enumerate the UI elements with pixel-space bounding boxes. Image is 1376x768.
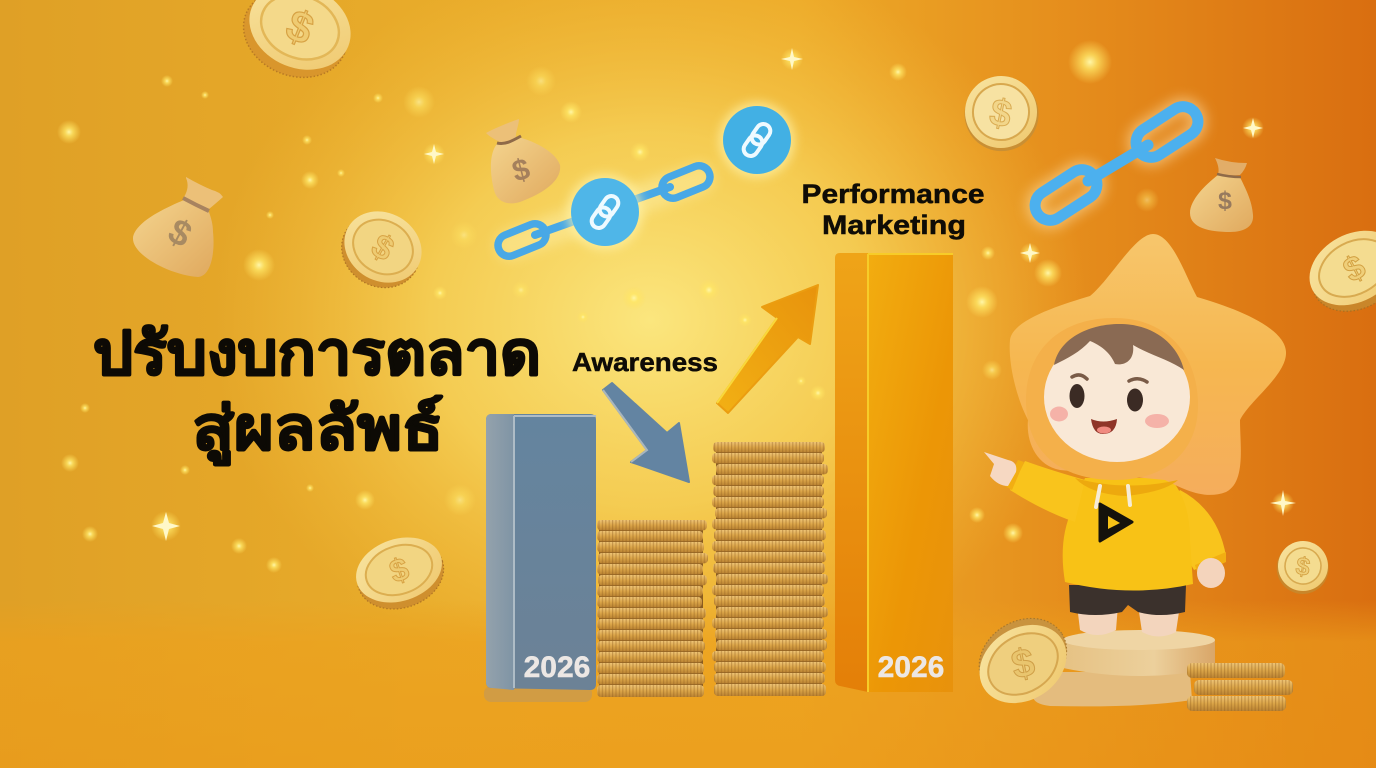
money bag: left: $	[162, 210, 199, 255]
mascot legs	[1077, 605, 1180, 636]
coin: upper right: $	[986, 91, 1015, 137]
mascot cheeks	[1050, 406, 1169, 428]
coin: upper right	[958, 69, 1046, 158]
coin stacks	[597, 442, 828, 697]
bar: awareness 2026: 2026	[524, 651, 590, 684]
chain with link badge	[495, 162, 713, 260]
coin: far right: $	[1337, 248, 1372, 290]
money bag: centre: $	[509, 152, 534, 189]
mascot left arm and hand	[984, 452, 1085, 522]
money bag: centre	[486, 119, 560, 203]
mascot shorts	[1069, 585, 1186, 615]
small coin stack	[1187, 663, 1293, 711]
mascot star hood	[1010, 234, 1286, 495]
arrow: awareness down	[603, 383, 689, 482]
coin: lower left	[348, 527, 453, 620]
mascot mouth	[1091, 419, 1117, 434]
mascot eyebrows	[1072, 375, 1147, 382]
money bag: left	[133, 177, 223, 277]
mascot hoodie	[1063, 478, 1193, 591]
arrow: performance up	[717, 285, 818, 413]
mascot face	[1044, 332, 1190, 462]
coin: top left: $	[279, 0, 320, 55]
mascot logo	[1100, 504, 1132, 541]
mascot	[984, 234, 1286, 636]
label: performance marketing	[802, 179, 984, 240]
label: performance marketing: Marketing	[822, 210, 966, 240]
sparkles and bokeh lights	[57, 40, 1296, 573]
coin: top left	[230, 0, 364, 93]
title: ปรับงบการตลาด	[93, 320, 541, 387]
mascot right arm and hand	[1165, 490, 1226, 588]
coin: lower left: $	[385, 550, 413, 590]
pedestal	[1033, 630, 1215, 706]
coin: pedestal	[962, 602, 1084, 719]
coin: pedestal: $	[1008, 640, 1038, 688]
coin: small right: $	[1294, 552, 1312, 582]
bar: awareness 2026	[484, 414, 596, 702]
coin: far right	[1297, 216, 1376, 326]
money bag: right	[1190, 158, 1253, 232]
label: performance marketing: Performance	[802, 179, 984, 209]
chain: right	[1029, 101, 1204, 226]
title	[93, 320, 541, 466]
bar: performance 2026	[835, 253, 953, 692]
money bag: right: $	[1218, 187, 1232, 215]
mascot hood rim	[1026, 318, 1198, 480]
link badge	[719, 102, 795, 178]
label: awareness: Awareness	[572, 347, 718, 377]
coin: middle left: $	[365, 227, 400, 269]
coin: middle left	[328, 198, 435, 302]
mascot hood collar and strings	[1075, 478, 1178, 507]
mascot eyes	[1070, 384, 1143, 412]
title: สู่ผลลัพธ์	[192, 395, 444, 466]
bar: performance 2026: 2026	[878, 651, 944, 684]
coin: small right	[1273, 537, 1333, 598]
mascot hair	[1054, 324, 1184, 370]
